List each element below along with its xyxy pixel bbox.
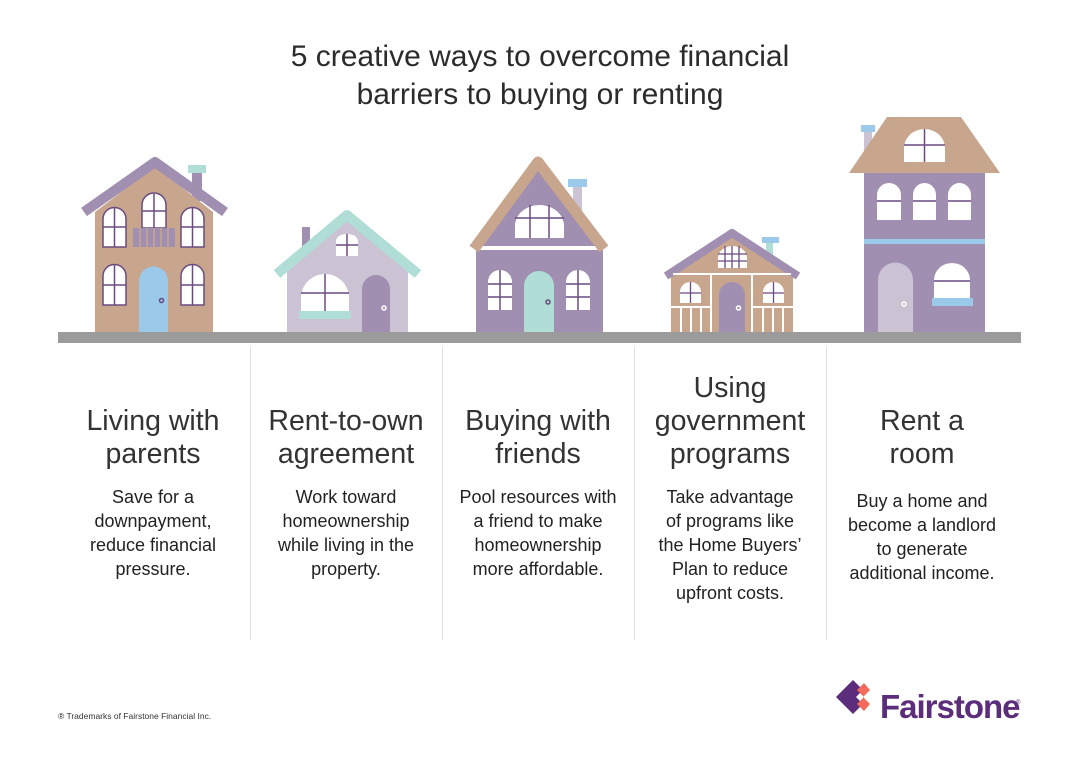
footnote: ® Trademarks of Fairstone Financial Inc. [58,711,211,721]
column 1: living with parents [86,405,220,579]
column 2: rent-to-own: Rent-to-own [268,405,424,437]
logo: Fairstone: ® [1016,699,1021,706]
logo: Fairstone [836,680,1021,725]
column dividers [250,347,826,640]
house 1: living with parents [84,162,225,332]
column 2: rent-to-own: property. [311,559,381,579]
column 1: living with parents: parents [105,438,201,470]
column 4: government programs: Take advantage [666,487,794,507]
column 5: rent a room: additional income. [849,563,995,583]
column 5: rent a room [848,405,996,583]
ground [58,332,1021,343]
column 5: rent a room: become a landlord [848,515,996,535]
column 1: living with parents: downpayment, [94,511,212,531]
column 3: buying with friends: friends [495,438,581,470]
column 4: government programs: upfront costs. [676,583,784,603]
column 3: buying with friends: Pool resources with [459,487,617,507]
column 2: rent-to-own: agreement [278,438,414,470]
column 5: rent a room: Rent a [880,405,964,437]
column 4: government programs: government [655,405,805,437]
column 4: government programs: Using [694,372,766,404]
logo: Fairstone: Fairstone [880,688,1020,725]
column 3: buying with friends: a friend to make [473,511,603,531]
house 2: rent-to-own [277,215,418,332]
column 5: rent a room: room [890,438,954,470]
column 1: living with parents: reduce financial [90,535,216,555]
column 3: buying with friends: homeownership [474,535,602,555]
column 5: rent a room: Buy a home and [856,491,988,511]
title: 5 creative ways to overcome financial [291,40,789,73]
column 4: government programs: of programs like [666,511,794,531]
column 2: rent-to-own: Work toward [296,487,396,507]
column 2: rent-to-own [268,405,424,579]
title [291,40,789,111]
house 4: government programs [666,233,798,332]
title: barriers to buying or renting [357,78,723,111]
column 1: living with parents: Living with [86,405,220,437]
column 5: rent a room: to generate [876,539,968,559]
column 3: buying with friends: Buying with [465,405,611,437]
column 3: buying with friends [459,405,617,579]
column 4: government programs: programs [670,438,790,470]
house 5: rent a room [849,117,1000,332]
column 4: government programs: Plan to reduce [672,559,788,579]
column 4: government programs [655,372,805,603]
column 1: living with parents: Save for a [112,487,195,507]
house 3: buying with friends [474,162,604,332]
column 2: rent-to-own: while living in the [277,535,414,555]
column 4: government programs: the Home Buyers’ [658,535,802,555]
column 1: living with parents: pressure. [115,559,191,579]
column 2: rent-to-own: homeownership [282,511,410,531]
column 3: buying with friends: more affordable. [473,559,603,579]
